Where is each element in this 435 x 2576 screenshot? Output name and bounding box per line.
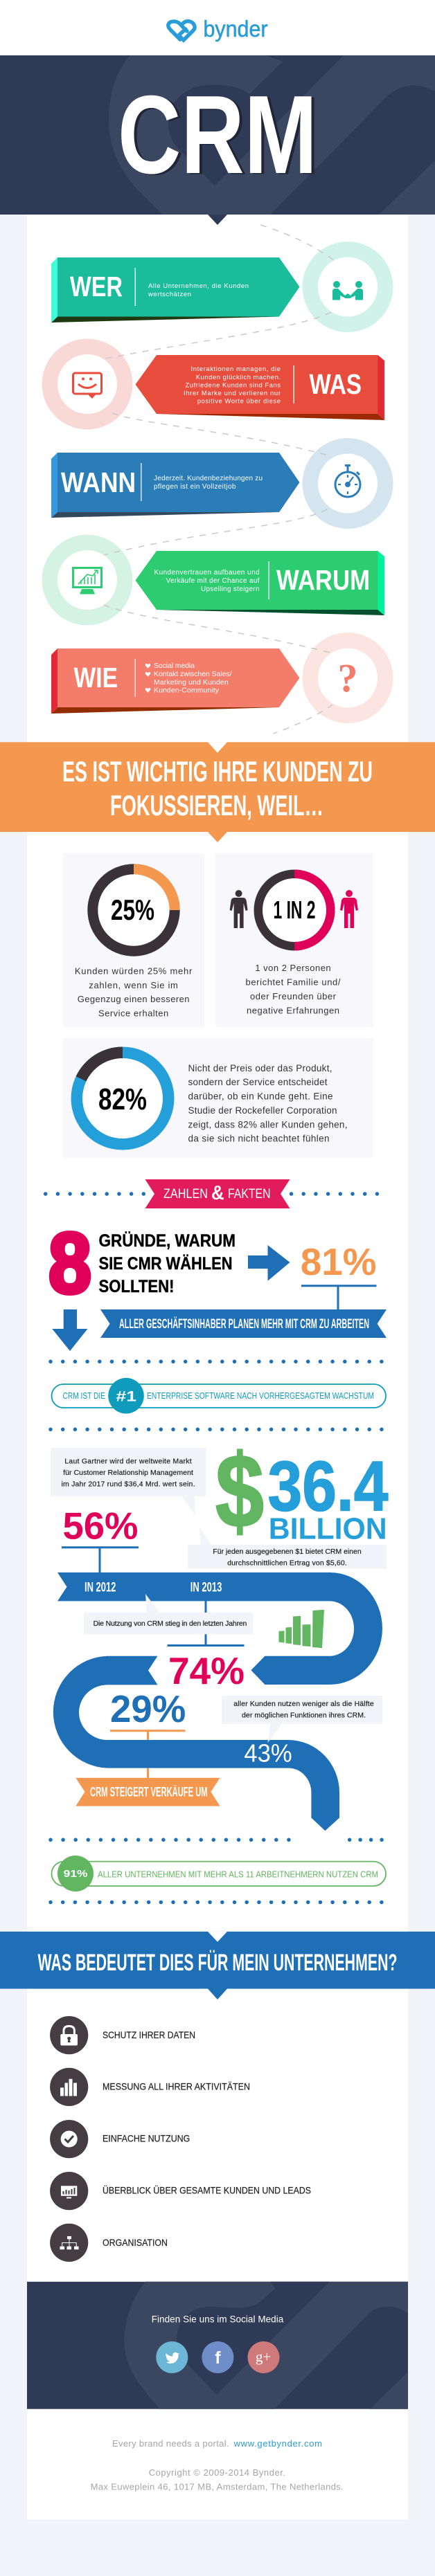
panel: WARUM [136,551,384,615]
callout: return on investment: durchschnittlichen Ertrag von $5,60. [227,1559,347,1567]
callout: Gartner [51,1448,206,1515]
icon: facebook [202,2341,233,2373]
footer: copyright [91,2467,344,2492]
panel: 82 percent: da sie sich nicht beachtet fühlen [188,1133,330,1143]
panel: WAS: Zufriedene Kunden sind Fans [186,382,281,389]
stat: 36.4 billion: 36.4 [267,1447,389,1526]
ribbon: Zahlen und Fakten: & [211,1182,224,1204]
icon: stopwatch [318,454,378,514]
stem: 2013 [168,1601,244,1647]
icon: lock [50,2016,88,2054]
callout: return on investment: Für jeden ausgegebenen $1 bietet CRM einen [213,1548,362,1556]
callout: Gartner: Laut Gartner wird der weltweite Markt [64,1457,192,1465]
panel: WIE: Marketing und Kunden [154,678,229,687]
panel: 25 percent: Service erhalten [98,1008,168,1019]
logo: bynder: bynder [204,16,268,42]
stat: 36.4 billion [215,1433,389,1549]
panel: WER: WER [70,271,123,302]
panel: 1 in 2: oder Freunden über [250,991,337,1001]
panel: 1 in 2: 1 von 2 Personen [255,963,331,973]
list item: overview: ÜBERBLICK ÜBER GESAMTE KUNDEN UND LEADS [103,2184,311,2196]
ring: monitor [42,534,133,626]
panel: WIE [51,648,299,714]
top logo strip [0,0,435,55]
road: lower curve [53,1656,339,1831]
heading: 8 reasons: SOLLTEN! [98,1277,175,1296]
heading: 8 reasons: GRÜNDE, WARUM [98,1231,236,1251]
callout: usage growth: Die Nutzung von CRM stieg in den letzten Jahren [94,1620,247,1628]
panel: WAS: Interaktionen managen, die [191,365,281,373]
panel: WIE: Social media [154,662,195,670]
panel: 82 percent [63,1038,373,1158]
panel: WIE: Kunden-Community [154,687,220,695]
list item: data protection: SCHUTZ IHRER DATEN [103,2029,195,2040]
footer: copyright: Copyright © 2009-2014 Bynder. [149,2467,285,2478]
stat: 29 percent: 29% [110,1687,186,1730]
footer panel: social media [27,2282,408,2409]
panel: WER [51,257,299,323]
ribbon: sales increase: CRM STEIGERT VERKÄUFE UM [90,1784,208,1799]
panel: WARUM: Kundenvertrauen aufbauen und [154,569,259,577]
panel: 1 in 2: negative Erfahrungen [247,1006,339,1016]
stat: 36.4 billion: BILLION [269,1512,387,1546]
panel: WAS: Kunden glücklich machen. [196,374,281,381]
panel: 82 percent: zeigt, dass 82% aller Kunden gehen, [188,1120,348,1130]
footer: tagline: Every brand needs a portal. [112,2438,229,2449]
icon: monitor chart [57,550,117,610]
pill: number one: #1 [116,1388,136,1405]
icon: facebook: f [215,2348,221,2368]
big number 8: 8 [48,1216,91,1312]
heading: 8 reasons [98,1231,236,1296]
stat: 81 percent: 81% [301,1240,377,1283]
logo: bynder [168,16,268,42]
list item: ease of use: EINFACHE NUTZUNG [103,2133,190,2144]
panel: WER: wertschätzen [148,291,191,298]
icon: google plus: g+ [256,2348,271,2365]
callout: usage growth [84,1594,253,1634]
ring: chat [42,339,133,429]
panel: WARUM: Verkäufe mit der Chance auf [166,577,260,585]
panel: WANN: Jederzeit. Kundenbeziehungen zu [154,475,263,482]
ribbon: Zahlen und Fakten: FAKTEN [228,1187,270,1201]
arrow: down [52,1309,87,1351]
arrow: right [248,1245,290,1281]
chart: green bars [278,1610,324,1648]
footer: tagline: www.getbynder.com [233,2438,322,2449]
panel: WANN: pflegen ist ein Vollzeitjob [154,483,236,491]
icon: google plus [248,2341,280,2373]
stat: 29 percent [110,1687,186,1779]
callout: Gartner: für Customer Relationship Management [63,1469,193,1477]
header banner [0,55,435,225]
panel: 1 in 2: 1 IN 2 [273,896,316,924]
icon: chat smile [57,354,117,414]
panel: 1 in 2: berichtet Familie und/ [245,977,341,988]
panel: 25 percent: zahlen, wenn Sie im [89,980,178,990]
icon: twitter [156,2341,188,2373]
road: upper curve: IN 2012 [85,1579,116,1595]
footer: copyright: Max Euweplein 46, 1017 MB, Amsterdam, The Netherlands. [91,2482,344,2492]
panel: 1 in 2 [215,853,373,1027]
pill: 91 percent [51,1856,386,1892]
icon: question mark [318,648,378,707]
icon: bars [50,2068,88,2106]
stat: 74 percent: 74% [168,1649,245,1692]
panel: WAS: positive Worte über diese [197,397,281,406]
panel: WAS: Ihrer Marke und verlieren nur [184,390,281,397]
icon: check [50,2120,88,2158]
list item: overview [50,2172,311,2210]
heading band: blue [0,1932,435,1999]
panel: WIE: Kontakt zwischen Sales/ [154,670,232,678]
panel: WANN: WANN [61,466,136,498]
panel: WARUM: Upselling steigern [201,586,259,593]
panel: WER: Alle Unternehmen, die Kunden [148,282,249,290]
callout: return on investment [188,1527,387,1569]
stat: 56 percent [62,1505,139,1573]
panel: 82 percent: Nicht der Preis oder das Produkt, [188,1063,332,1073]
callout: unused functions: der möglichen Funktionen ihres CRM. [242,1711,366,1719]
heading band: orange: FOKUSSIEREN, WEIL… [110,789,323,822]
ribbon: Zahlen und Fakten [145,1179,290,1208]
panel: 82 percent: darüber, ob ein Kunde geht. Eine [188,1091,332,1102]
pill: number one: ENTERPRISE SOFTWARE NACH VORHERGESAGTEM WACHSTUM [147,1391,374,1401]
callout: Gartner: im Jahr 2017 rund $36,4 Mrd. wert sein. [61,1480,195,1488]
icon: question mark: ? [338,655,357,700]
pill: 91 percent: 91% [64,1868,87,1880]
ribbon: Zahlen und Fakten: ZAHLEN [163,1187,208,1201]
panel: 82 percent: Studie der Rockefeller Corporation [188,1105,337,1116]
stat: 81 percent [301,1240,377,1311]
list item: organisation [50,2224,168,2262]
panel: 82 percent: sondern der Service entscheidet [188,1077,328,1087]
panel: 25 percent [63,853,204,1027]
panel: 82 percent: 82% [98,1082,147,1116]
pill: number one: CRM IST DIE [62,1391,105,1401]
pill: 91 percent: ALLER UNTERNEHMEN MIT MEHR ALS 11 ARBEITNEHMERN NUTZEN CRM [98,1870,378,1880]
icon: person dark [230,890,248,928]
icon: person pink [340,890,358,928]
panel: 25 percent: 25% [111,894,154,926]
list item: data protection [50,2016,195,2054]
ring: question [302,633,393,723]
footer: tagline [112,2438,322,2449]
pill: number one [51,1378,386,1413]
list item: measurement [50,2068,250,2106]
road: upper curve: IN 2013 [190,1579,222,1595]
list item: ease of use [50,2120,190,2158]
icon: handshake [318,257,378,317]
ribbon: sales increase [76,1778,220,1806]
panel: 25 percent: Kunden würden 25% mehr [75,966,193,976]
stat: 56 percent: 56% [62,1505,138,1548]
footer panel: social media: Finden Sie uns im Social Media [152,2314,284,2325]
icon: monitor [50,2172,88,2210]
list item: organisation: ORGANISATION [103,2237,168,2248]
callout: unused functions [222,1696,382,1743]
header banner: CRM [118,73,317,197]
panel: WARUM: WARUM [276,564,370,596]
stat: 36.4 billion: $ [215,1433,264,1549]
stat: 43 percent: 43% [244,1739,292,1768]
panel: WAS [136,355,384,420]
ring: stopwatch [302,438,393,529]
title: CRM [121,73,320,198]
panel: WIE: WIE [73,662,118,693]
road: upper curve [57,1572,382,1685]
heading band: orange [0,742,435,842]
panel: WANN [51,453,299,518]
callout: unused functions: aller Kunden nutzen weniger als die Hälfte [233,1700,374,1708]
panel: WAS: WAS [309,368,362,400]
list item: measurement: MESSUNG ALL IHRER AKTIVITÄTEN [103,2080,250,2092]
heading: 8 reasons: SIE CMR WÄHLEN [98,1254,233,1273]
ribbon: business owners [100,1309,387,1338]
icon: org chart [50,2224,88,2262]
ring: handshake [302,242,393,332]
panel: 25 percent: Gegenzug einen besseren [78,994,190,1004]
